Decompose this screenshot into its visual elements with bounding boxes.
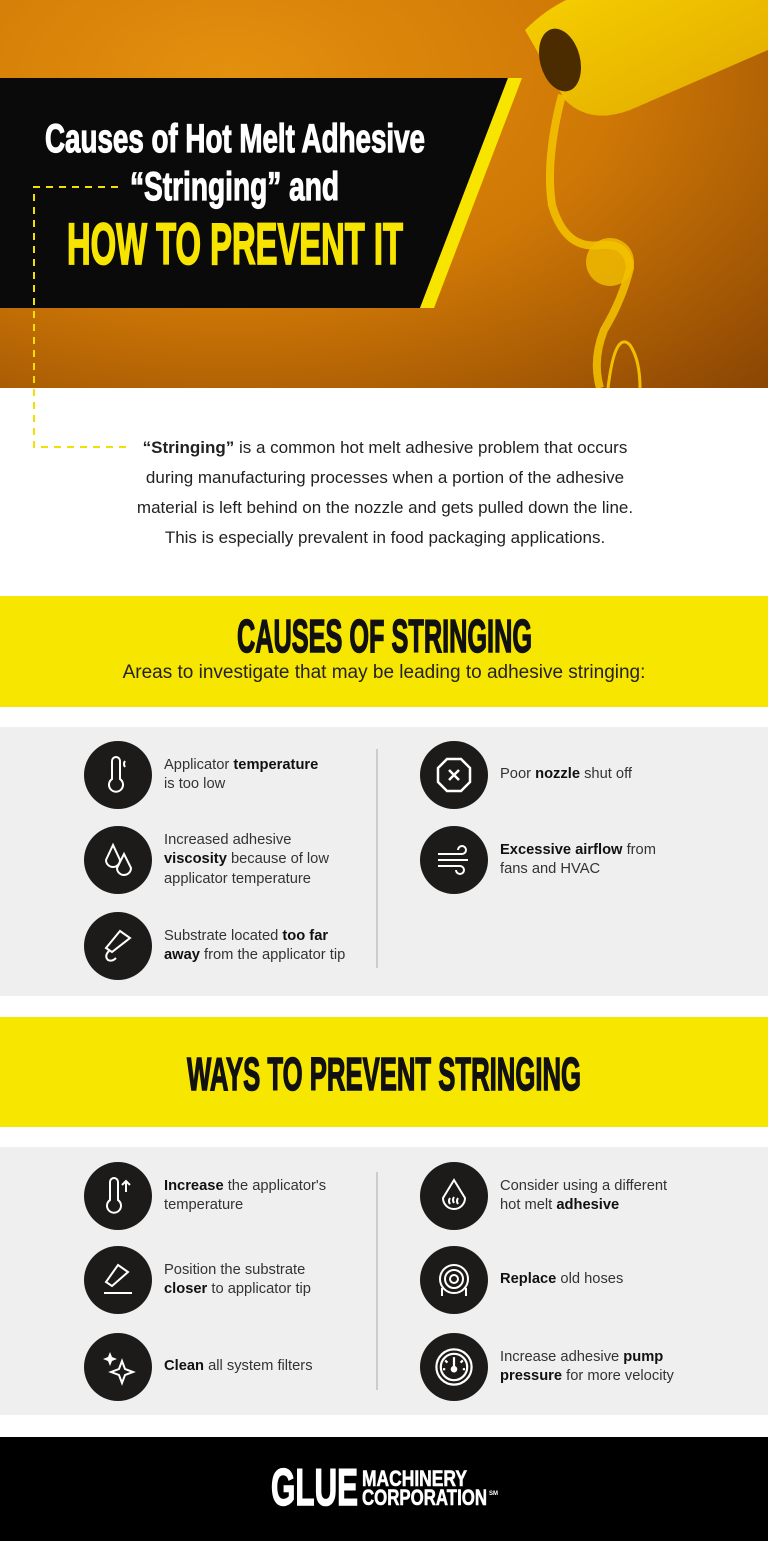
footer with logo — [0, 1437, 768, 1541]
prevent: pump pressure — [420, 1333, 674, 1401]
prevent: different adhesive: hot melt adhesive — [500, 1197, 619, 1213]
glue stream illustration — [0, 0, 768, 388]
intro text: This is especially prevalent in food packaging applications. — [165, 528, 605, 547]
cause: temperature: is too low — [164, 776, 225, 792]
intro text — [137, 438, 633, 547]
cause: airflow: Excessive airflow from — [500, 842, 656, 858]
intro text: material is left behind on the nozzle and gets pulled down the line. — [137, 498, 633, 517]
cause: airflow — [420, 826, 656, 894]
logo: CORPORATION — [362, 1485, 487, 1510]
intro text: during manufacturing processes when a portion of the adhesive — [146, 468, 624, 487]
prevent: clean filters — [84, 1333, 313, 1401]
cause: substrate far: Substrate located too far — [164, 928, 328, 944]
logo: SM — [489, 1491, 498, 1497]
prevent: hoses: Replace old hoses — [500, 1271, 623, 1287]
cause: temperature: Applicator temperature — [164, 756, 318, 772]
title text — [45, 117, 425, 209]
prevent panel — [0, 1147, 768, 1415]
prevent: increase temp: temperature — [164, 1197, 243, 1213]
title highlight: HOW TO PREVENT IT — [67, 212, 403, 277]
title text: “Stringing” and — [130, 165, 339, 209]
prevent: different adhesive — [420, 1162, 667, 1230]
prevent: position closer: Position the substrate — [164, 1262, 305, 1278]
prevent: increase temp — [84, 1162, 326, 1230]
hero banner — [0, 0, 768, 388]
prevent: pump pressure: pressure for more velocity — [500, 1368, 674, 1384]
causes panel — [0, 727, 768, 996]
prevent: hoses — [420, 1246, 623, 1314]
logo: MACHINERY — [362, 1466, 467, 1491]
prevent: position closer: closer to applicator tip — [164, 1281, 311, 1297]
cause: viscosity: Increased adhesive — [164, 832, 291, 848]
cause: temperature — [84, 741, 318, 809]
title text: Causes of Hot Melt Adhesive — [45, 117, 425, 161]
causes subtitle: Areas to investigate that may be leading to adhesive stringing: — [123, 662, 645, 683]
causes header band — [0, 596, 768, 707]
black title panel — [0, 78, 508, 308]
cause: nozzle: Poor nozzle shut off — [500, 766, 632, 782]
prevent: pump pressure: Increase adhesive pump — [500, 1348, 663, 1364]
dashed connector — [33, 186, 126, 448]
cause: viscosity — [84, 826, 329, 894]
cause: viscosity: applicator temperature — [164, 871, 311, 887]
intro text: “Stringing” is a common hot melt adhesive problem that occurs — [143, 438, 627, 457]
cause: nozzle — [420, 741, 632, 809]
cause: substrate far — [84, 912, 345, 980]
prevent: different adhesive: Consider using a different — [500, 1178, 667, 1194]
prevent: clean filters: Clean all system filters — [164, 1358, 313, 1374]
cause: substrate far: away from the applicator tip — [164, 947, 345, 963]
cause: viscosity: viscosity because of low — [164, 851, 329, 867]
logo — [271, 1459, 498, 1517]
logo: GLUE — [271, 1459, 358, 1517]
prevent header band — [0, 1017, 768, 1127]
cause: airflow: fans and HVAC — [500, 861, 600, 877]
prevent: position closer — [84, 1246, 311, 1314]
prevent: increase temp: Increase the applicator's — [164, 1178, 326, 1194]
